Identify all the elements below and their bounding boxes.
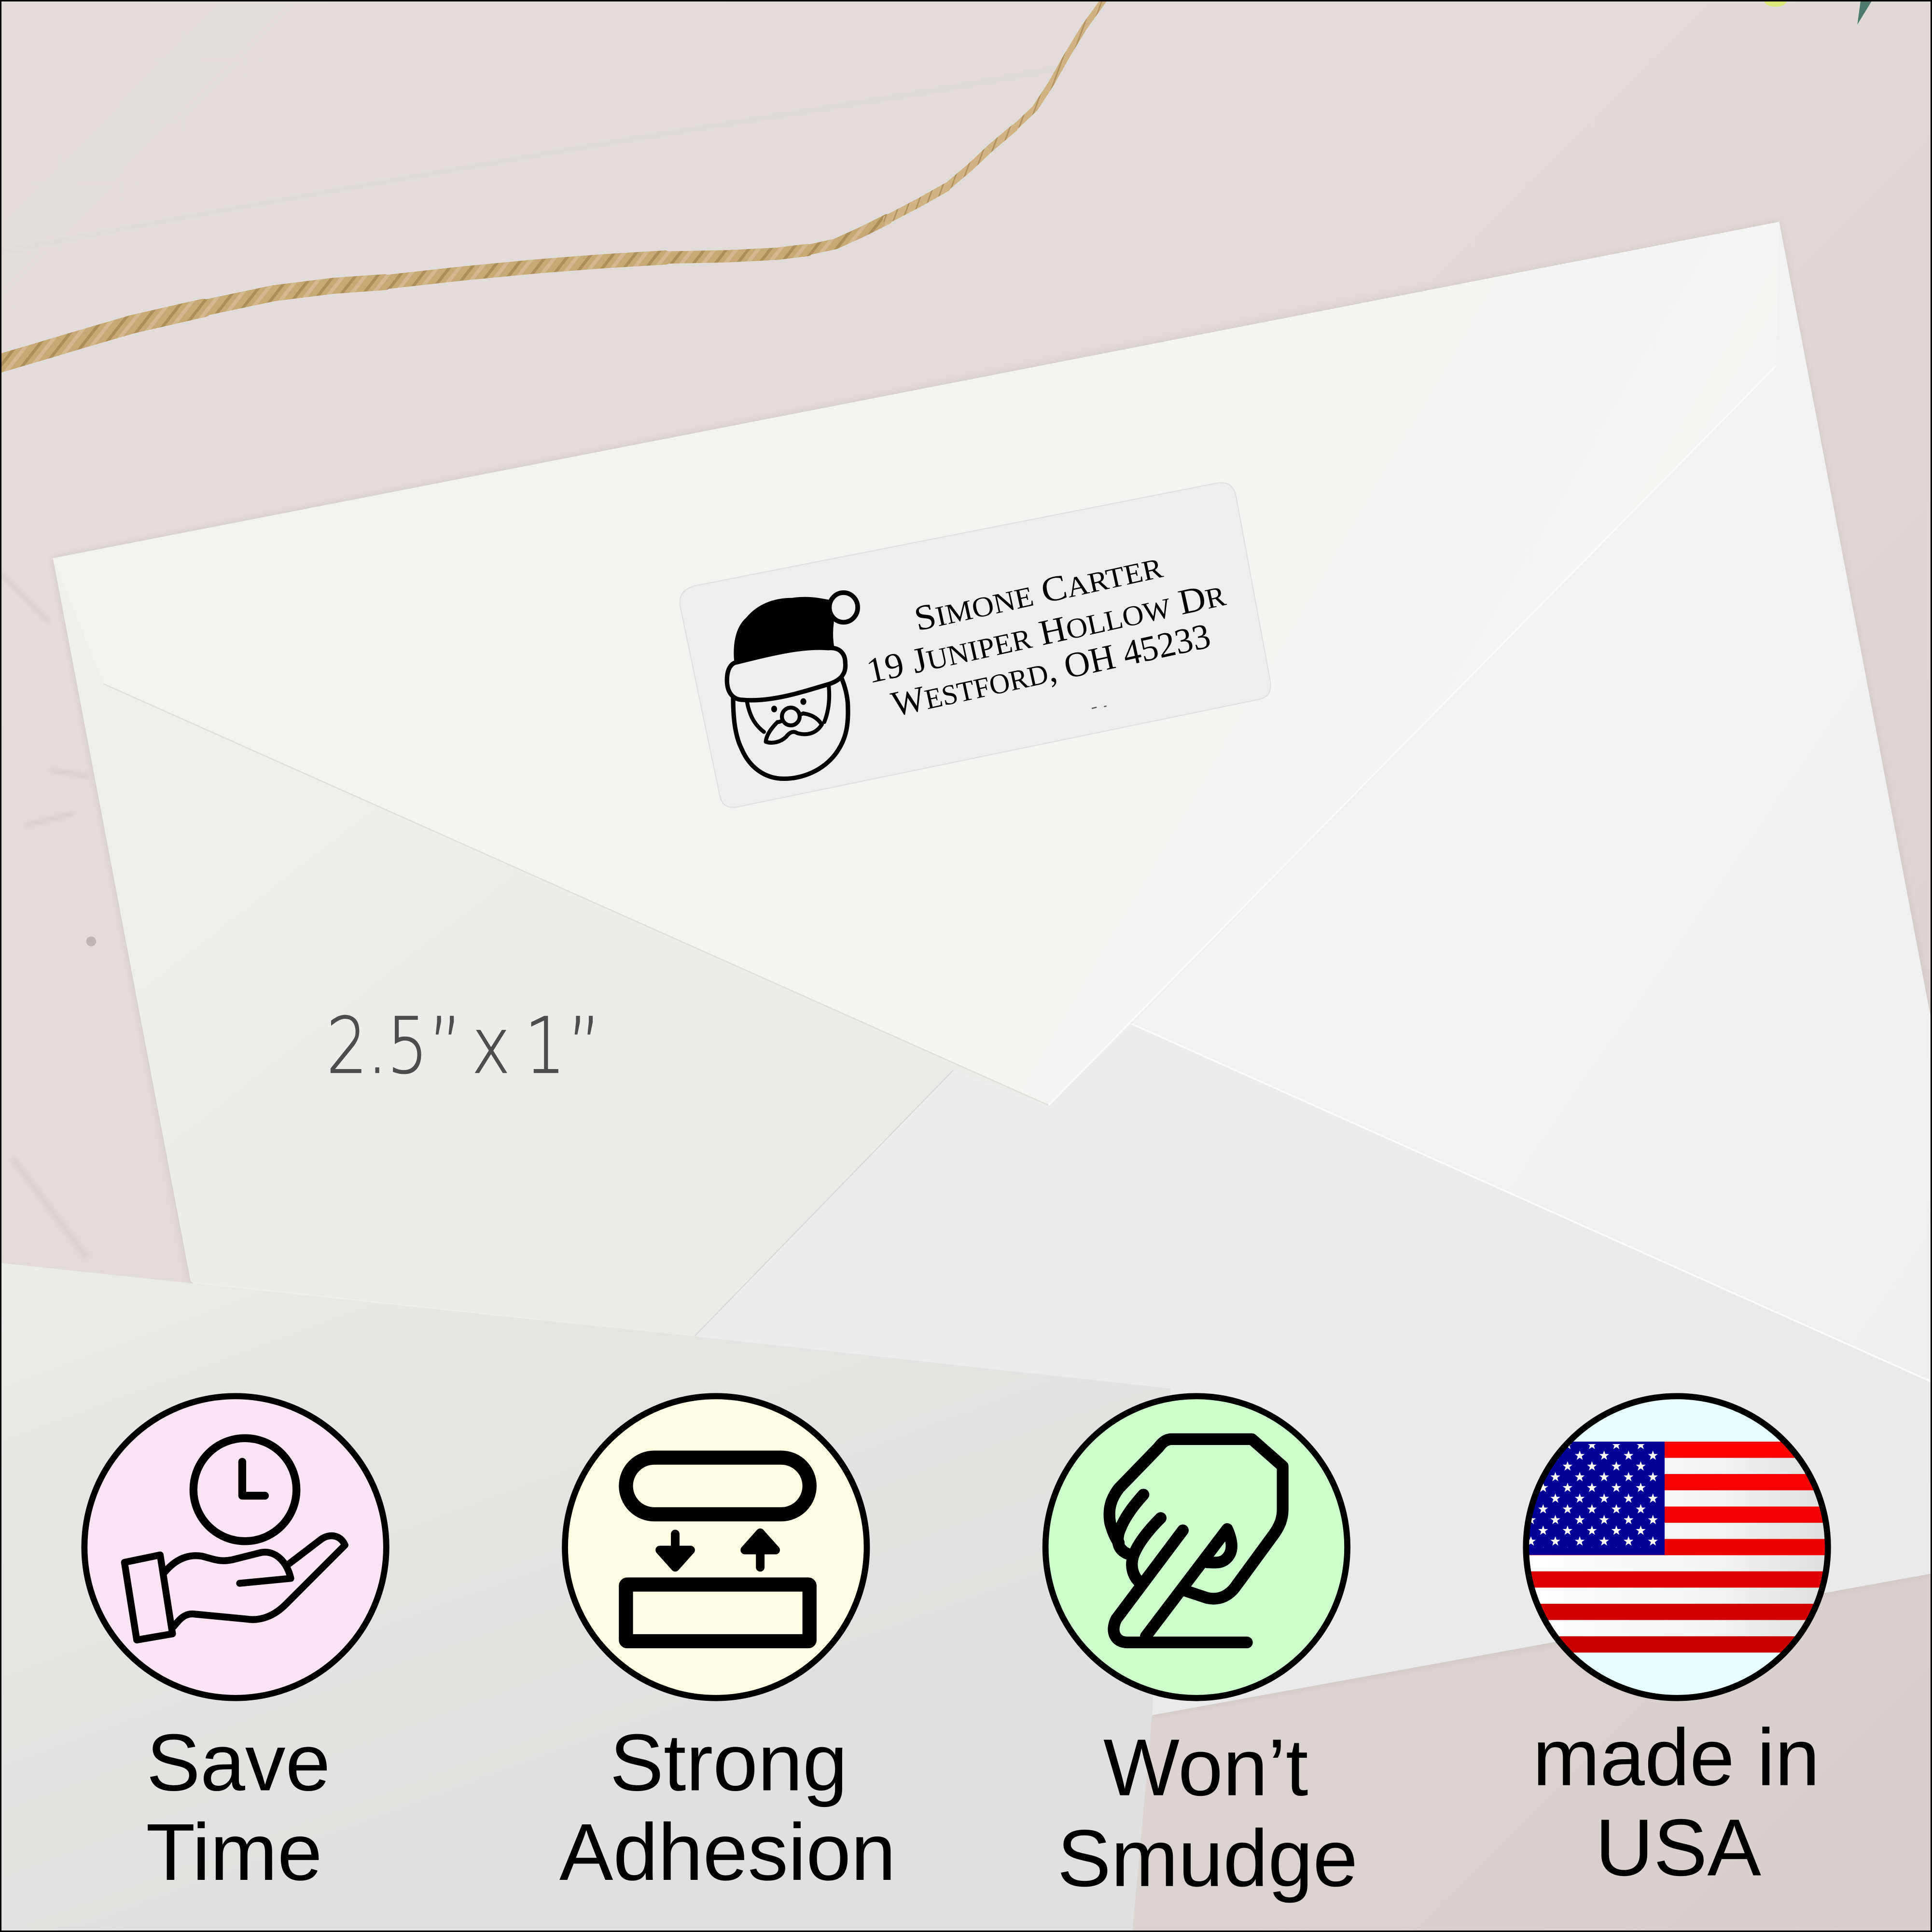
foreground sheet [0,1263,1170,1932]
folded finger one [1118,1495,1143,1554]
label: made in USA: USA [1595,1803,1761,1893]
santa moustache [766,713,822,743]
envelope flap [53,222,1779,1105]
flag stars [1523,1444,1660,1547]
arrow up [745,1533,776,1567]
cuff [125,1555,172,1640]
label: Strong Adhesion: Strong [610,1718,848,1807]
twine [0,0,1107,365]
label sticker [680,483,1271,807]
pointing finger and surface line [1113,1530,1247,1642]
envelope shadow [53,222,1932,1715]
fingertip nail [1208,1529,1232,1563]
leaf tip, top right [1857,1,1872,25]
green circle [1045,1396,1348,1698]
name line: Simone Carter [910,542,1167,640]
icon: santa face [727,593,858,778]
santa face outline [733,673,848,778]
feature: won't smudge [1045,1396,1358,1904]
flag stripes [1523,1442,1831,1653]
bottom layer box [626,1585,809,1641]
santa nose [782,708,800,725]
icon: clock over open hand [125,1438,345,1640]
pink circle [84,1396,386,1698]
icon: adhesive layers [626,1458,809,1641]
envelope bottom pocket panel [690,1024,1932,1725]
envelope [53,222,1932,1725]
icon: american flag [1523,1442,1831,1653]
palm and thumb [165,1552,291,1584]
feature: strong adhesion [559,1396,896,1897]
feature: save time [84,1396,386,1897]
santa hat brim [727,648,846,700]
circle outline [1526,1396,1828,1698]
santa hat [735,598,834,666]
top layer pill [626,1458,809,1515]
envelope left pocket panel [53,558,1049,1336]
yellow blob, top edge [1765,0,1787,7]
pale blue circle [1526,1396,1828,1698]
fingers [174,1536,345,1626]
icon: finger touching surface [1110,1439,1283,1642]
address text [862,542,1229,725]
santa eyes [771,698,806,712]
back of hand [1110,1439,1283,1598]
street line: 19 Juniper Hollow Dr [862,570,1229,692]
folded finger two [1132,1518,1161,1585]
label: Won't Smudge: Smudge [1057,1814,1358,1904]
label: Won't Smudge: Won’t [1103,1723,1308,1813]
envelope right pocket panel [1132,222,1932,1382]
arrow down [660,1534,691,1567]
santa hat pom-pom [829,593,858,622]
yellow circle [565,1396,867,1698]
clock [194,1438,296,1541]
size text: 2.5” x 1” [326,1001,601,1091]
label: Save Time: Save [146,1718,331,1807]
feature: made in USA [1523,1396,1831,1893]
label: Save Time: Time [146,1807,322,1897]
envelope base [53,222,1932,1715]
label: made in USA: made in [1533,1713,1820,1803]
pointing finger right edge [1146,1529,1227,1636]
address label [680,483,1271,807]
stray specks on label [1092,706,1107,709]
flag canton [1523,1442,1665,1555]
santa beard inner line [747,680,829,732]
city line: Westford, OH 45233 [887,612,1214,725]
label: Strong Adhesion: Adhesion [559,1807,896,1897]
